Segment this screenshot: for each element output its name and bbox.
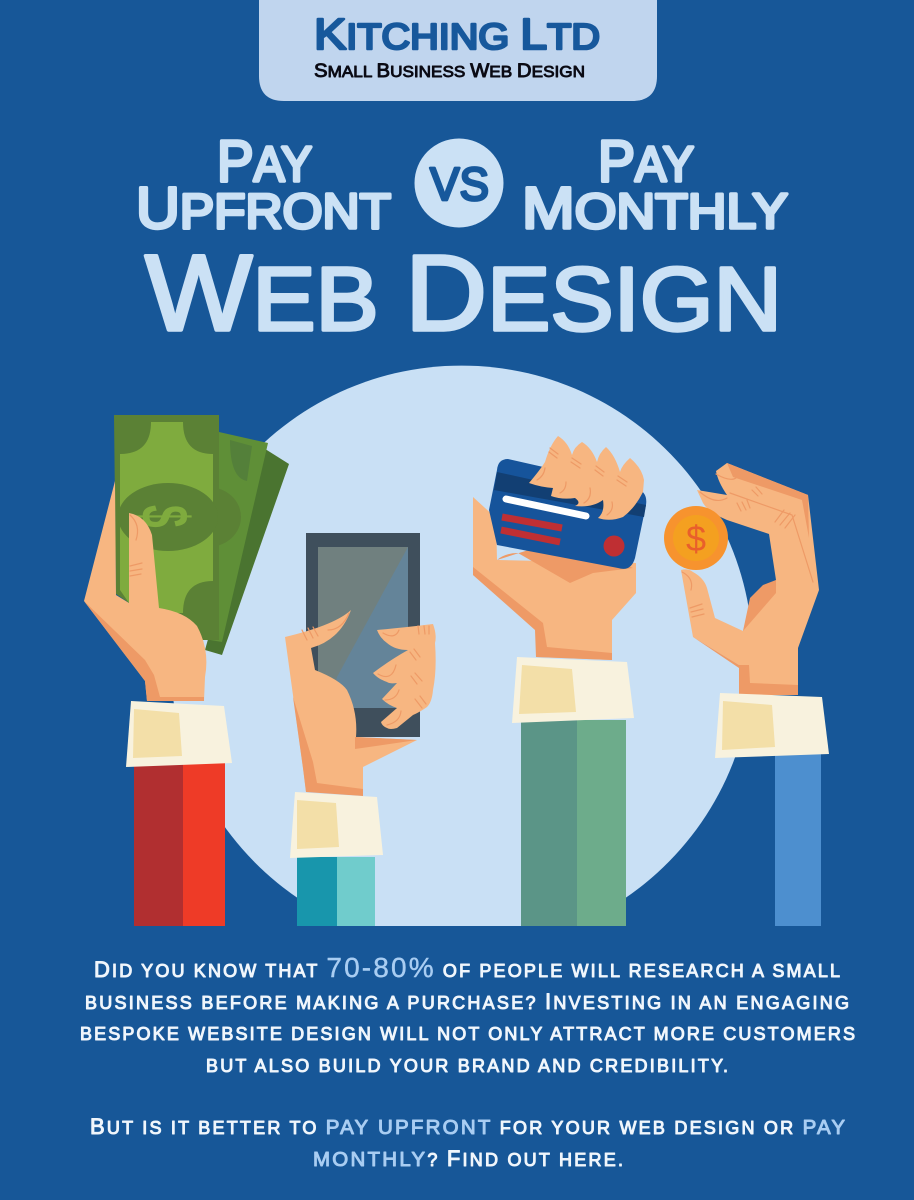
cuff xyxy=(715,693,829,758)
tagline: SMALL BUSINESS WEB DESIGN xyxy=(314,61,585,82)
vs badge xyxy=(414,138,504,228)
coin xyxy=(664,506,728,570)
illustration: hand holding credit card xyxy=(473,436,646,926)
illustration: hand holding coin xyxy=(664,463,829,926)
cuff xyxy=(126,701,232,767)
fingers xyxy=(529,436,644,520)
cuff xyxy=(290,792,383,858)
title: Pay Upfront: PAY xyxy=(217,129,312,194)
body text: intro paragraph: BESPOKE WEBSITE DESIGN WILL NOT ONLY ATTRACT MORE CUSTOMERS xyxy=(80,1024,855,1044)
cuff xyxy=(512,657,634,723)
title: Web Design: WEB DESIGN xyxy=(145,232,782,353)
sleeve xyxy=(134,760,225,926)
background circle xyxy=(170,366,753,926)
illustration: hand holding phone xyxy=(285,533,436,926)
illustration: hand holding cash xyxy=(84,415,289,926)
body text: intro paragraph: BUSINESS BEFORE MAKING A PURCHASE? INVESTING IN AN ENGAGING xyxy=(85,989,849,1014)
credit card xyxy=(489,459,646,569)
phone xyxy=(306,533,420,737)
title: Pay Upfront: UPFRONT xyxy=(136,176,391,241)
vs badge: VS xyxy=(430,158,489,210)
body text: intro paragraph: DID YOU KNOW THAT 70-80% OF PEOPLE WILL RESEARCH A SMALL xyxy=(94,952,840,983)
hand xyxy=(285,610,436,796)
title: Pay Monthly xyxy=(522,129,788,241)
hand xyxy=(681,463,819,695)
body text: question xyxy=(90,1114,845,1171)
title: Pay Monthly: PAY xyxy=(598,129,694,194)
title: Pay Upfront xyxy=(136,129,391,241)
sleeve xyxy=(297,857,375,926)
banknotes xyxy=(114,415,289,655)
body text: question: MONTHLY? FIND OUT HERE. xyxy=(313,1146,623,1171)
sleeve xyxy=(775,752,821,926)
body text: intro paragraph xyxy=(80,952,855,1076)
title: Pay Monthly: MONTHLY xyxy=(522,176,788,241)
brand name: KITCHING LTD xyxy=(314,10,600,59)
palm xyxy=(473,497,636,660)
banknotes: $ xyxy=(127,505,202,528)
sleeve xyxy=(521,720,626,926)
body text: intro paragraph: BUT ALSO BUILD YOUR BRAND AND CREDIBILITY. xyxy=(206,1056,728,1076)
body text: question: BUT IS IT BETTER TO PAY UPFRONT FOR YOUR WEB DESIGN OR PAY xyxy=(90,1114,845,1139)
header panel: Kitching Ltd xyxy=(259,0,657,101)
hand xyxy=(84,481,206,701)
coin: $ xyxy=(686,518,706,559)
